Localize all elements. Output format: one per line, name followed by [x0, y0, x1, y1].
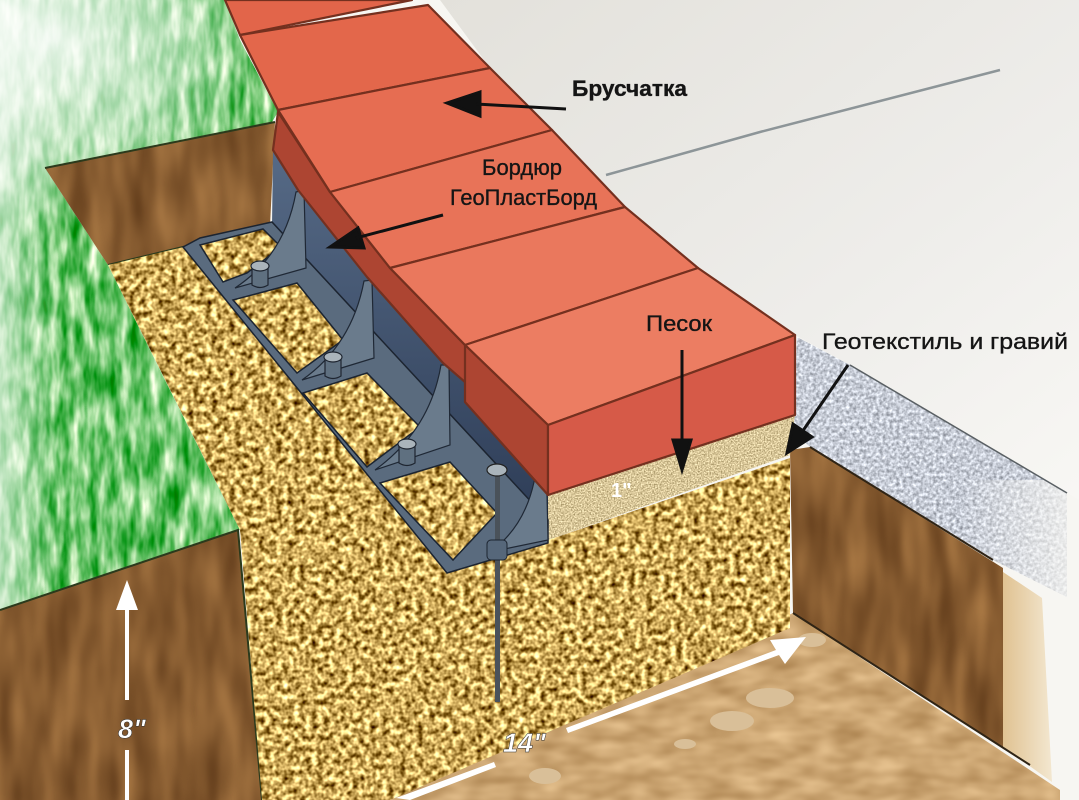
label: border — [330, 155, 597, 248]
sand layer — [548, 416, 795, 540]
brick 4 — [390, 207, 698, 345]
brick 5 side — [465, 345, 548, 495]
arrow — [116, 580, 138, 800]
plastic edging — [183, 150, 548, 573]
concrete side face — [790, 330, 1070, 600]
text: Бордюр — [482, 155, 562, 180]
stake 1 head — [251, 261, 269, 271]
end rib — [490, 448, 548, 552]
label: geotextile — [787, 329, 1068, 453]
value: 14" — [503, 728, 547, 758]
open ground right — [1000, 570, 1052, 782]
stake shaft — [495, 472, 500, 702]
long stake — [487, 464, 507, 702]
dimension 8 inch — [116, 580, 147, 800]
short stakes — [251, 261, 416, 466]
soil cut top left — [40, 118, 280, 268]
slab joint — [606, 70, 1000, 175]
soil edges — [0, 122, 275, 800]
text: Песок — [646, 311, 712, 336]
arrow — [447, 92, 566, 116]
slab outline — [850, 365, 1067, 493]
stake collar — [487, 540, 507, 560]
text line 2: ГеоПластБорд — [450, 185, 597, 210]
soil wall right — [790, 445, 1005, 750]
text: Брусчатка — [572, 76, 688, 101]
text: Геотекстиль и гравий — [822, 329, 1068, 354]
rib 1 — [235, 190, 306, 288]
arrow — [673, 350, 691, 470]
label: sand — [646, 311, 712, 470]
brick 1 — [240, 5, 490, 110]
grass — [0, 0, 280, 615]
top brick stub — [225, 0, 412, 35]
brick 2 — [278, 68, 552, 192]
floor stones — [529, 633, 826, 784]
brick side band — [273, 112, 548, 450]
brick 5 — [465, 268, 795, 425]
brick 3 — [330, 130, 625, 268]
stake head — [487, 464, 507, 476]
stake 2 — [325, 358, 341, 378]
pale wash top left — [0, 0, 256, 224]
soil cut bottom left — [0, 525, 265, 800]
ribs — [235, 190, 548, 552]
arrow — [396, 637, 806, 800]
dimension 14 inch — [396, 637, 806, 800]
1 inch label: 1" — [611, 480, 632, 502]
pale wash left edge — [0, 0, 60, 615]
stake 3 — [399, 445, 415, 466]
wall outlines — [793, 447, 1030, 765]
rib 3 — [375, 365, 450, 470]
grass texture — [0, 0, 280, 615]
concrete fade right — [973, 480, 1067, 596]
gravel bed — [105, 220, 795, 800]
brick 5 front — [548, 335, 795, 495]
value: 8" — [118, 714, 147, 744]
arrow — [330, 215, 443, 248]
arrow — [787, 365, 848, 453]
rib 2 — [302, 280, 374, 380]
edging wall — [272, 150, 548, 535]
concrete slab — [440, 0, 1079, 500]
stake 1 — [252, 267, 268, 288]
bricks — [225, 0, 795, 495]
base frame with windows — [183, 222, 548, 573]
stake 3 head — [398, 439, 416, 449]
label: paving — [447, 76, 688, 116]
stake 2 head — [324, 352, 342, 362]
excavation floor — [390, 610, 1060, 800]
